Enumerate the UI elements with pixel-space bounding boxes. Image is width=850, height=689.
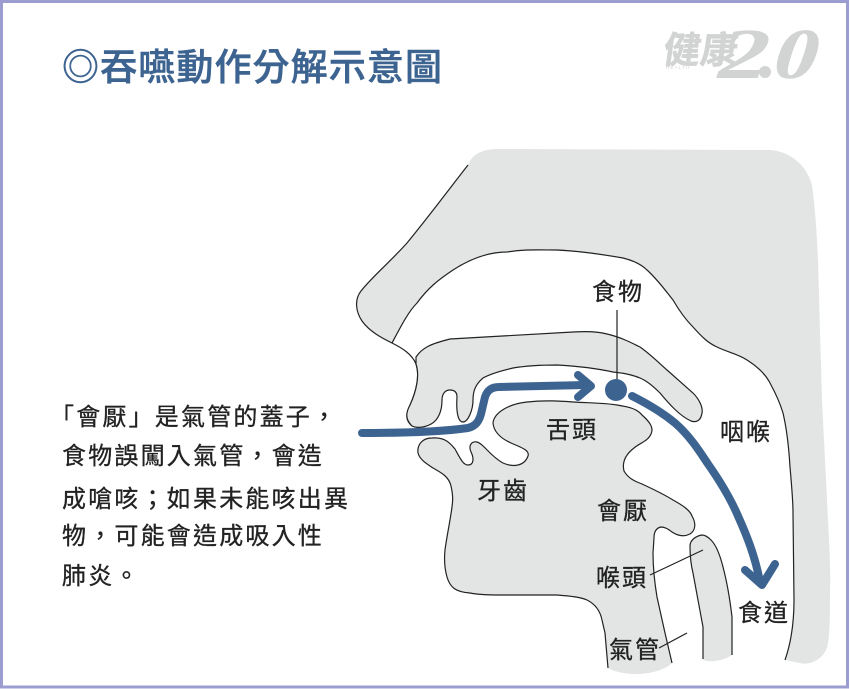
explanatory text: 成嗆咳；如果未能咳出異 <box>62 486 350 513</box>
logo: health 2.0: 健康 <box>661 29 741 71</box>
explanatory text <box>50 404 350 590</box>
larynx and trachea wall outline <box>690 535 732 659</box>
head outline: nose and upper lip <box>357 165 468 426</box>
labels: 舌頭 <box>546 417 598 444</box>
logo: health 2.0: 2 <box>707 14 783 94</box>
labels: 牙齒 <box>477 478 529 505</box>
labels <box>477 279 790 664</box>
head gray fill <box>357 149 830 664</box>
leader line: larynx <box>650 550 703 575</box>
larynx and trachea wall fill <box>690 535 732 661</box>
anatomy diagram <box>357 149 830 685</box>
leader line: food <box>616 310 618 382</box>
food bolus dot <box>605 379 627 401</box>
palate and upper teeth <box>407 332 702 427</box>
logo: health 2.0 <box>661 14 833 94</box>
logo: health 2.0: HEALTH <box>666 65 691 70</box>
explanatory text: 食物誤闖入氣管，會造 <box>62 443 324 470</box>
labels: 氣管 <box>609 637 661 664</box>
arrow: food entering the mouth <box>362 375 591 433</box>
leader line: trachea <box>659 633 687 648</box>
labels: 食物 <box>592 279 644 306</box>
tongue and jaw fill <box>418 401 695 674</box>
mouth and throat cavity <box>392 250 794 685</box>
labels: 喉頭 <box>596 565 648 592</box>
explanatory text: 「會厭」是氣管的蓋子， <box>50 404 338 431</box>
explanatory text: 物，可能會造成吸入性 <box>62 523 324 550</box>
labels: 會厭 <box>597 498 649 525</box>
logo: health 2.0: 0 <box>763 14 833 94</box>
labels: 咽喉 <box>720 419 772 446</box>
title: ◎吞嚥動作分解示意圖 <box>62 47 442 88</box>
explanatory text: 肺炎。 <box>62 563 141 590</box>
chin and neck outline <box>418 453 608 668</box>
throat back wall outline <box>392 250 794 660</box>
arrow: food going down the esophagus <box>632 396 775 585</box>
labels: 食道 <box>738 600 790 627</box>
tongue and epiglottis outline <box>418 401 695 663</box>
